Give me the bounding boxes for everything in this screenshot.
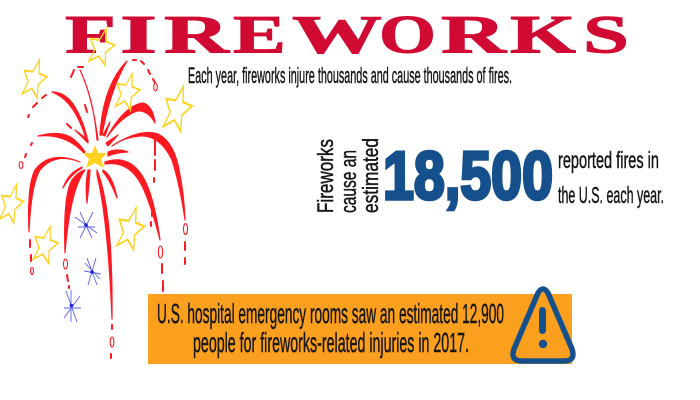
title: O: [379, 4, 436, 64]
firework red streaks: [29, 61, 185, 319]
title: F: [65, 4, 116, 64]
stat: rotated lead-in text: Fireworks: [313, 139, 338, 213]
icon: centre gold star: [83, 145, 107, 168]
title: R: [164, 4, 231, 64]
illustration: fireworks burst: [0, 25, 196, 358]
title: W: [292, 4, 382, 64]
icon: blue sparks: [64, 212, 101, 322]
stat: trailing text: [558, 147, 664, 208]
title: S: [583, 4, 629, 64]
stat: rotated lead-in text: estimated: [358, 138, 383, 213]
icon: yellow stars: [0, 25, 196, 264]
title: E: [233, 4, 286, 64]
title: K: [510, 4, 576, 64]
title: [65, 4, 629, 64]
stat: rotated lead-in text: cause an: [336, 150, 361, 213]
icon: warning triangle: [513, 289, 573, 361]
callout text: [157, 298, 504, 358]
title: I: [120, 4, 157, 64]
stat: 18,500: 18,500: [383, 138, 553, 214]
stat: rotated lead-in text: [313, 138, 383, 213]
callout: hospital injuries: [148, 294, 572, 364]
firework red dashes: [19, 60, 188, 358]
title: R: [441, 4, 508, 64]
callout background: [148, 294, 572, 364]
